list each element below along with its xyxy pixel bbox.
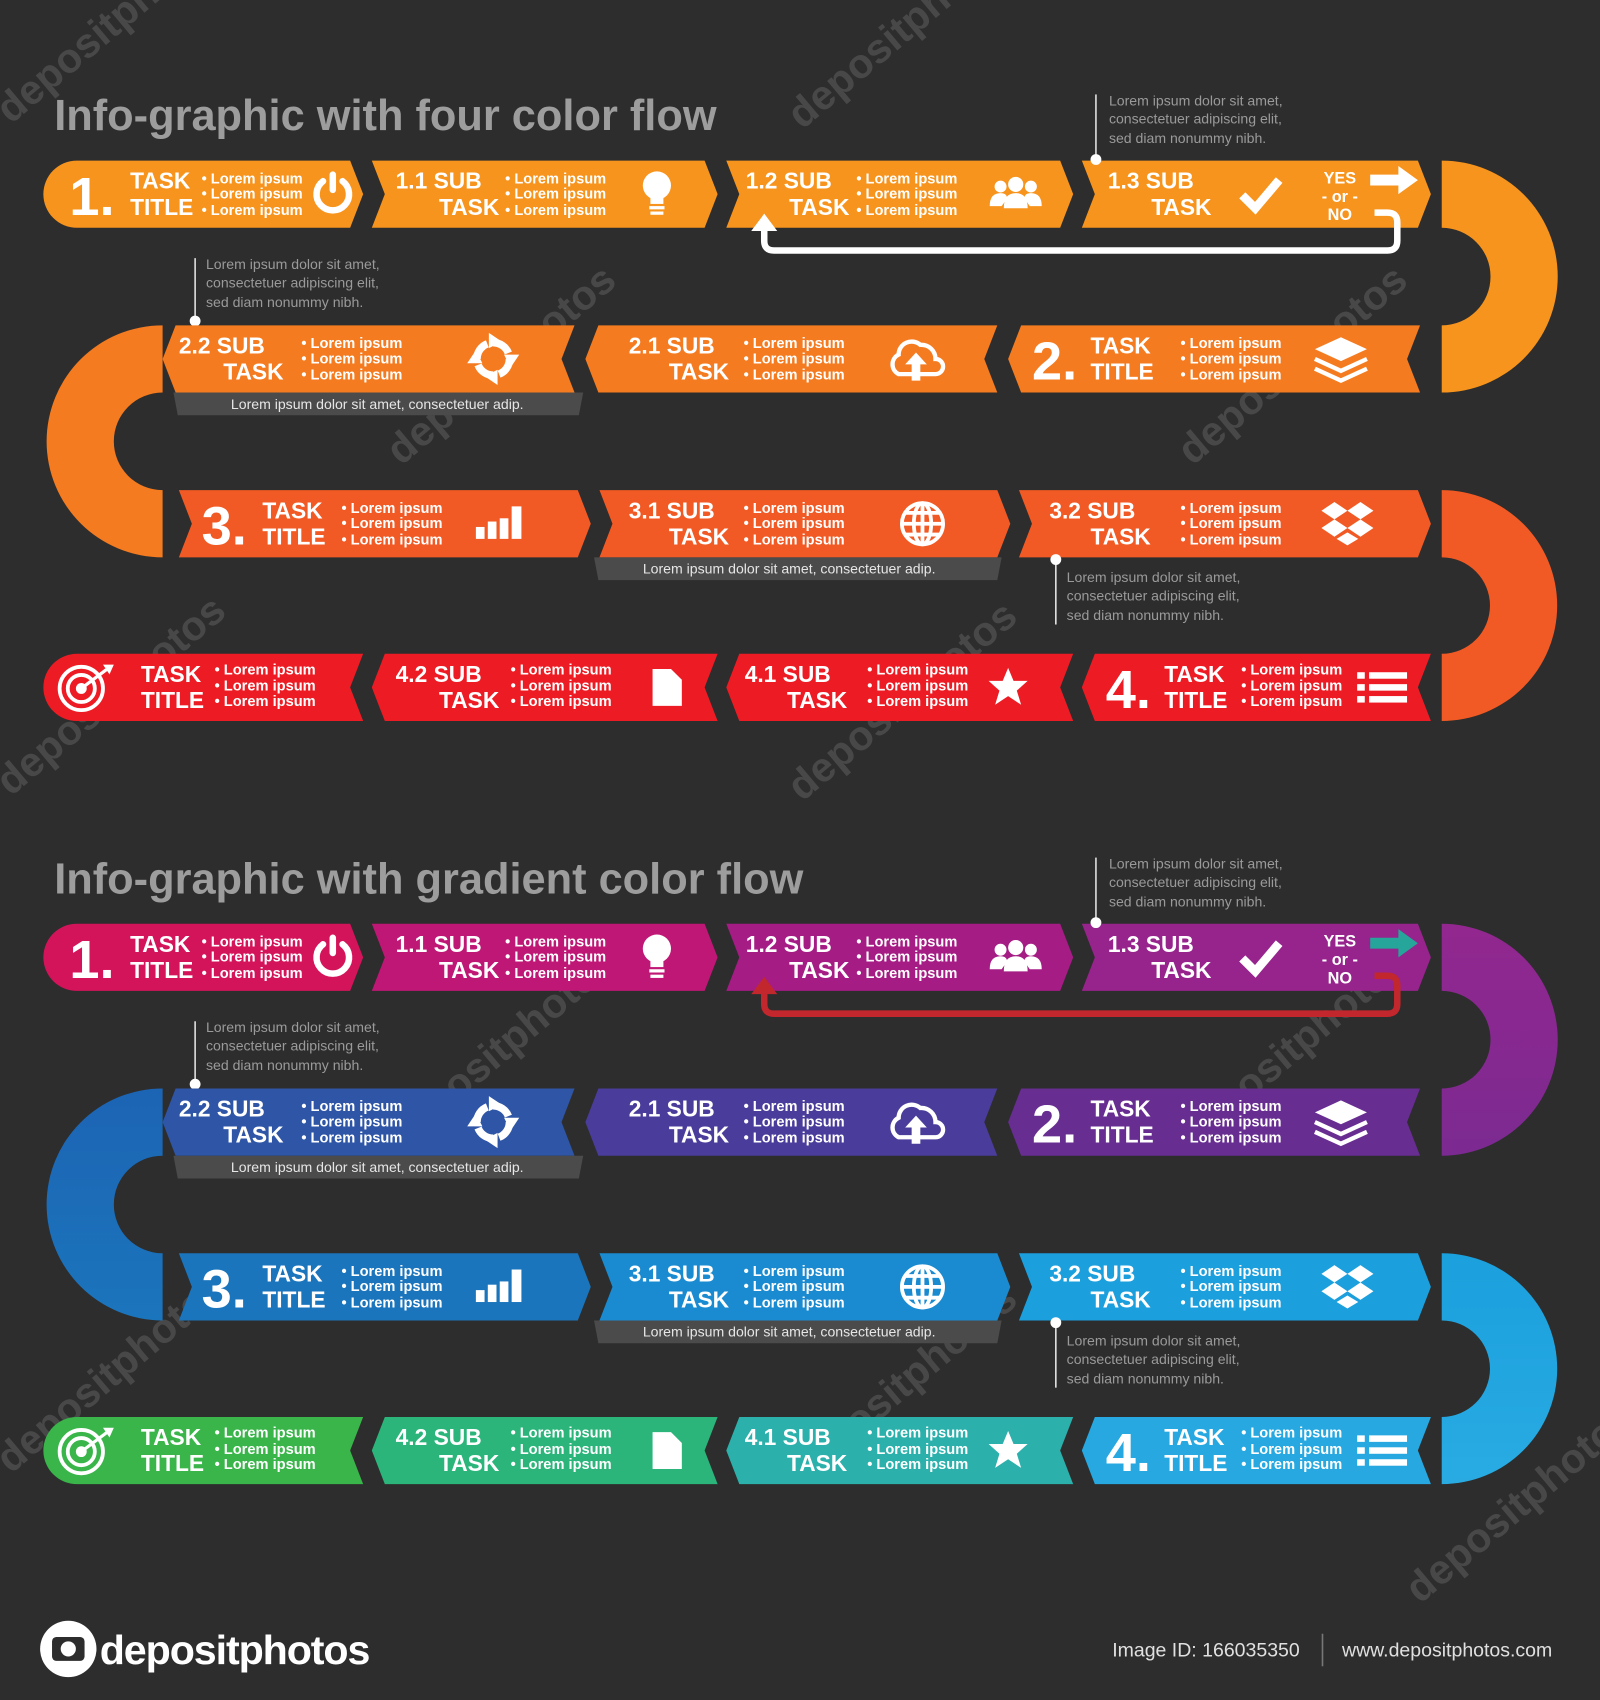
segment: 4.1 sub task: 4.1 SUB — [745, 1424, 831, 1450]
segment: 4 task title: TASK — [1164, 661, 1225, 687]
segment: 3.1 sub task: • Lorem ipsum — [744, 532, 845, 548]
segment: 2 task title: TASK — [1091, 333, 1151, 359]
segment: 3.2 sub task — [1019, 1253, 1431, 1320]
segment: 2 task title — [1008, 325, 1420, 393]
segment: 4.1 sub task: • Lorem ipsum — [867, 694, 968, 710]
segment: 1.1 sub task: • Lorem ipsum — [505, 187, 606, 203]
segment: 2.2 sub task: • Lorem ipsum — [301, 368, 402, 384]
arrow: yes — [1370, 929, 1418, 957]
callout: 3.2: Lorem ipsum dolor sit amet, — [1067, 1332, 1240, 1348]
callout: top right: consectetuer adipiscing elit, — [1109, 111, 1282, 127]
segment: 3 task title: TASK — [262, 497, 323, 523]
segment: 1.3 sub task: TASK — [1151, 957, 1212, 983]
segment: target task title: • Lorem ipsum — [215, 1426, 316, 1442]
section: gradient color flow — [43, 855, 1558, 1484]
segment: 2.2 sub task: TASK — [223, 1122, 284, 1148]
callout: 2.2: consectetuer adipiscing elit, — [206, 274, 379, 290]
segment: 2.1 sub task: • Lorem ipsum — [744, 1099, 845, 1115]
segment: 1 task title: • Lorem ipsum — [202, 203, 303, 219]
segment: 4.2 sub task: • Lorem ipsum — [511, 662, 612, 678]
segment: 4.2 sub task: TASK — [439, 1450, 500, 1476]
segment: 4.2 sub task: • Lorem ipsum — [511, 1426, 612, 1442]
segment: 4 task title: TITLE — [1164, 687, 1227, 713]
segment: 3 task title: • Lorem ipsum — [341, 1279, 442, 1295]
segment: 3.1 sub task: • Lorem ipsum — [744, 1264, 845, 1280]
segment: 2 task title: • Lorem ipsum — [1180, 336, 1282, 352]
watermarks: depositphotos — [377, 256, 624, 473]
note bar: row2: Lorem ipsum dolor sit amet, consectetuer adip. — [231, 1159, 524, 1175]
segment: 2.1 sub task: • Lorem ipsum — [744, 336, 845, 352]
callout: 3.2 — [1050, 1317, 1240, 1388]
segment: 1.1 sub task: • Lorem ipsum — [505, 203, 606, 219]
segment: 3 task title: TITLE — [262, 523, 326, 549]
title: four color flow: Info-graphic with four color flow — [54, 92, 717, 140]
note bar: row3 — [594, 1320, 1002, 1343]
callout: 2.2: Lorem ipsum dolor sit amet, — [206, 1019, 380, 1035]
segment: 4.1 sub task: • Lorem ipsum — [867, 1442, 968, 1458]
segment: 1.2 sub task: TASK — [789, 957, 850, 983]
segment: 4 task title: • Lorem ipsum — [1241, 1426, 1342, 1442]
callout: 3.2: consectetuer adipiscing elit, — [1067, 1351, 1240, 1367]
title: gradient color flow: Info-graphic with gradient color flow — [54, 855, 804, 903]
watermarks: depositphotos — [778, 1275, 1025, 1492]
segment: 1.2 sub task: • Lorem ipsum — [856, 966, 957, 982]
segment: 2 task title: • Lorem ipsum — [1180, 368, 1282, 384]
segment: 2 task title: 2. — [1032, 1095, 1077, 1155]
callout: 2.2: Lorem ipsum dolor sit amet, — [206, 256, 380, 272]
segment: 4 task title: • Lorem ipsum — [1241, 1457, 1342, 1473]
segment: 1 task title: TITLE — [130, 957, 193, 983]
segment: 3 task title: • Lorem ipsum — [341, 516, 442, 532]
note bar: row3: Lorem ipsum dolor sit amet, consectetuer adip. — [643, 561, 935, 577]
segment: 4.2 sub task: • Lorem ipsum — [511, 679, 612, 695]
segment: 4.1 sub task: • Lorem ipsum — [867, 662, 968, 678]
callout: 2.2: sed diam nonummy nibh. — [206, 294, 363, 310]
segment: 2.1 sub task: 2.1 SUB — [629, 1096, 715, 1122]
segment: 2.2 sub task: TASK — [223, 359, 284, 385]
segment: 3.1 sub task: TASK — [669, 1286, 730, 1312]
arc: row1 to row2 — [1442, 924, 1558, 1156]
callout: 3.2: sed diam nonummy nibh. — [1067, 607, 1224, 623]
segment: 2 task title: TITLE — [1091, 1122, 1154, 1148]
segment: 1.1 sub task: • Lorem ipsum — [505, 950, 606, 966]
segment: 3 task title: 3. — [202, 496, 247, 556]
segment: 1.3 sub task — [1082, 161, 1431, 228]
segment: 2.1 sub task: • Lorem ipsum — [744, 1131, 845, 1147]
segment: 2.1 sub task: 2.1 SUB — [629, 333, 715, 359]
callout: top right — [1091, 92, 1283, 165]
segment: 2.2 sub task: 2.2 SUB — [179, 1096, 265, 1122]
segment: 1.2 sub task: 1.2 SUB — [746, 168, 832, 194]
callout: top right: Lorem ipsum dolor sit amet, — [1109, 92, 1283, 108]
footer: image id: www.depositphotos.com — [1341, 1640, 1552, 1662]
segment: target task title: • Lorem ipsum — [215, 694, 316, 710]
segment: 1 task title: TITLE — [130, 194, 193, 220]
segment: 3.1 sub task: • Lorem ipsum — [744, 1279, 845, 1295]
segment: 2 task title: • Lorem ipsum — [1180, 1099, 1282, 1115]
segment: 1 task title — [43, 161, 363, 228]
segment: target task title: TASK — [141, 661, 202, 687]
segment: 4.1 sub task: TASK — [787, 687, 848, 713]
segment: 1 task title: • Lorem ipsum — [202, 187, 303, 203]
callout: 3.2: Lorem ipsum dolor sit amet, — [1067, 569, 1240, 585]
arc: row2 to row3 — [47, 325, 163, 557]
arc: row2 to row3 — [47, 1088, 163, 1320]
segment: 2.2 sub task: • Lorem ipsum — [301, 1131, 402, 1147]
segment: 1.1 sub task: TASK — [439, 194, 500, 220]
segment: 1.1 sub task — [372, 924, 718, 991]
segment: 3 task title — [179, 1253, 591, 1320]
segment: 3 task title: 3. — [202, 1259, 247, 1319]
segment: 1 task title: TASK — [130, 168, 191, 194]
segment: 3 task title — [179, 490, 591, 557]
note bar: row2 — [173, 393, 583, 415]
segment: 4.2 sub task: • Lorem ipsum — [511, 1442, 612, 1458]
segment: 1.2 sub task: • Lorem ipsum — [856, 187, 957, 203]
segment: target task title: • Lorem ipsum — [215, 679, 316, 695]
segment: 1.3 sub task: 1.3 SUB — [1108, 931, 1194, 957]
segment: 2.1 sub task: • Lorem ipsum — [744, 1114, 845, 1130]
segment: 1 task title: 1. — [69, 930, 115, 990]
watermarks: depositphotos — [377, 938, 624, 1156]
segment: 4.2 sub task: • Lorem ipsum — [511, 694, 612, 710]
segment: 1 task title: • Lorem ipsum — [202, 171, 303, 187]
segment: 3.2 sub task — [1019, 490, 1431, 557]
callout: 2.2 — [190, 256, 380, 326]
segment: 2.1 sub task: TASK — [669, 1122, 730, 1148]
segment: 3.2 sub task: 3.2 SUB — [1049, 1260, 1135, 1286]
callout: 3.2: consectetuer adipiscing elit, — [1067, 588, 1240, 604]
watermarks: depositphotos — [778, 592, 1025, 809]
segment: 4 task title: • Lorem ipsum — [1241, 662, 1342, 678]
segment: 3.1 sub task: • Lorem ipsum — [744, 1295, 845, 1311]
arc: row3 to row4 — [1442, 1253, 1557, 1484]
callout: top right: consectetuer adipiscing elit, — [1109, 874, 1282, 890]
segment: 4 task title: • Lorem ipsum — [1241, 1442, 1342, 1458]
segment: 1.3 sub task: TASK — [1151, 194, 1212, 220]
callout: top right — [1091, 855, 1283, 928]
segment: 2 task title: TITLE — [1091, 359, 1154, 385]
segment: 4.2 sub task: 4.2 SUB — [396, 1424, 482, 1450]
segment: 1.2 sub task: • Lorem ipsum — [856, 171, 957, 187]
segment: 2.2 sub task: • Lorem ipsum — [301, 336, 402, 352]
segment: 1.3 sub task: - or - — [1322, 188, 1358, 206]
callout: top right: sed diam nonummy nibh. — [1109, 130, 1266, 146]
segment: 1 task title: • Lorem ipsum — [202, 950, 303, 966]
arrow: yes — [1370, 166, 1418, 194]
segment: 3 task title: • Lorem ipsum — [341, 501, 442, 517]
segment: 1.3 sub task: YES — [1324, 932, 1356, 950]
segment: 1.1 sub task: • Lorem ipsum — [505, 966, 606, 982]
segment: 3.1 sub task — [599, 490, 1010, 557]
segment: 3.1 sub task: TASK — [669, 523, 730, 549]
segment: 1.2 sub task: • Lorem ipsum — [856, 934, 957, 950]
segment: 4 task title — [1082, 1417, 1431, 1484]
segment: 4.1 sub task: • Lorem ipsum — [867, 1457, 968, 1473]
arc: row3 to row4 — [1442, 490, 1557, 721]
segment: 1.1 sub task: TASK — [439, 957, 500, 983]
segment: 1 task title: • Lorem ipsum — [202, 934, 303, 950]
callout: 2.2: consectetuer adipiscing elit, — [206, 1038, 379, 1054]
footer: image id: Image ID: 166035350 — [1112, 1640, 1300, 1662]
segment: 4.1 sub task: • Lorem ipsum — [867, 679, 968, 695]
segment: 3.2 sub task: • Lorem ipsum — [1180, 516, 1282, 532]
segment: 2.1 sub task: • Lorem ipsum — [744, 368, 845, 384]
segment: 2 task title: • Lorem ipsum — [1180, 1114, 1282, 1130]
segment: 4.2 sub task — [372, 1417, 718, 1484]
segment: 3.2 sub task: TASK — [1091, 1286, 1151, 1312]
segment: target task title: • Lorem ipsum — [215, 1457, 316, 1473]
segment: 1.2 sub task: • Lorem ipsum — [856, 950, 957, 966]
segment: 4.2 sub task: 4.2 SUB — [396, 661, 482, 687]
segment: 1.3 sub task: YES — [1324, 169, 1356, 187]
segment: 4.2 sub task: • Lorem ipsum — [511, 1457, 612, 1473]
segment: 1.1 sub task: • Lorem ipsum — [505, 171, 606, 187]
segment: 2.2 sub task: • Lorem ipsum — [301, 1099, 402, 1115]
segment: 4.1 sub task — [726, 654, 1073, 721]
segment: 3 task title: TASK — [262, 1260, 323, 1286]
segment: 2.1 sub task: TASK — [669, 359, 730, 385]
segment: 4 task title — [1082, 654, 1431, 721]
segment: 4.1 sub task — [726, 1417, 1073, 1484]
watermarks: depositphotos — [1169, 938, 1416, 1156]
segment: 4.1 sub task: 4.1 SUB — [745, 661, 831, 687]
segment: 1.1 sub task: 1.1 SUB — [396, 168, 482, 194]
segment: 1.3 sub task: - or - — [1322, 951, 1358, 969]
callout: top right: sed diam nonummy nibh. — [1109, 893, 1266, 909]
callout: 2.2: sed diam nonummy nibh. — [206, 1057, 363, 1073]
segment: 2.1 sub task — [585, 1088, 997, 1156]
segment: 2 task title: 2. — [1032, 332, 1077, 392]
segment: target task title: TITLE — [141, 1450, 204, 1476]
arrow: no loop back — [751, 213, 1397, 251]
segment: 1.1 sub task: • Lorem ipsum — [505, 934, 606, 950]
segment: 3.1 sub task — [599, 1253, 1010, 1320]
segment: 1 task title: TASK — [130, 931, 191, 957]
segment: 1.2 sub task — [726, 924, 1073, 991]
segment: 1.2 sub task: 1.2 SUB — [746, 931, 832, 957]
segment: 3.1 sub task: • Lorem ipsum — [744, 516, 845, 532]
segment: target task title — [43, 1417, 363, 1484]
segment: target task title: • Lorem ipsum — [215, 1442, 316, 1458]
segment: 1 task title — [43, 924, 363, 991]
note bar: row3: Lorem ipsum dolor sit amet, consectetuer adip. — [643, 1324, 935, 1340]
segment: 3.2 sub task: 3.2 SUB — [1049, 497, 1135, 523]
note bar: row3 — [594, 557, 1002, 580]
arc: row1 to row2 — [1442, 161, 1558, 393]
segment: target task title: • Lorem ipsum — [215, 662, 316, 678]
segment: 4 task title: TASK — [1164, 1424, 1225, 1450]
footer: logo: depositphotos — [100, 1627, 370, 1673]
segment: 1.3 sub task: 1.3 SUB — [1108, 168, 1194, 194]
segment: target task title — [43, 654, 363, 721]
footer: logo — [40, 1621, 370, 1677]
segment: 3 task title: • Lorem ipsum — [341, 1295, 442, 1311]
segment: 2.2 sub task: 2.2 SUB — [179, 333, 265, 359]
segment: 4 task title: 4. — [1106, 660, 1151, 720]
segment: 3 task title: • Lorem ipsum — [341, 1264, 442, 1280]
segment: target task title: TASK — [141, 1424, 202, 1450]
segment: 1.2 sub task — [726, 161, 1073, 228]
segment: 3.2 sub task: • Lorem ipsum — [1180, 1264, 1282, 1280]
segment: 3.1 sub task: • Lorem ipsum — [744, 501, 845, 517]
segment: 4.2 sub task — [372, 654, 718, 721]
segment: 3.1 sub task: 3.1 SUB — [629, 497, 715, 523]
segment: 2.1 sub task — [585, 325, 997, 393]
segment: 1.3 sub task — [1082, 924, 1431, 991]
arrow: no loop back — [751, 976, 1397, 1014]
segment: 1 task title: • Lorem ipsum — [202, 966, 303, 982]
segment: 2.1 sub task: • Lorem ipsum — [744, 351, 845, 367]
segment: 2 task title: • Lorem ipsum — [1180, 351, 1282, 367]
segment: 4.2 sub task: TASK — [439, 687, 500, 713]
note bar: row2: Lorem ipsum dolor sit amet, consectetuer adip. — [231, 396, 524, 412]
segment: 3 task title: • Lorem ipsum — [341, 532, 442, 548]
segment: 4.1 sub task: TASK — [787, 1450, 848, 1476]
segment: 4 task title: • Lorem ipsum — [1241, 694, 1342, 710]
segment: 4 task title: 4. — [1106, 1423, 1151, 1483]
segment: 3.1 sub task: 3.1 SUB — [629, 1260, 715, 1286]
segment: 3.2 sub task: • Lorem ipsum — [1180, 1295, 1282, 1311]
callout: top right: Lorem ipsum dolor sit amet, — [1109, 855, 1283, 871]
footer: image id — [1112, 1634, 1552, 1666]
section: four color flow — [43, 92, 1558, 721]
segment: 4.1 sub task: • Lorem ipsum — [867, 1426, 968, 1442]
segment: 2.2 sub task — [163, 325, 575, 393]
segment: target task title: TITLE — [141, 687, 204, 713]
callout: 2.2 — [190, 1019, 380, 1090]
callout: 3.2 — [1050, 554, 1240, 625]
callout: 3.2: sed diam nonummy nibh. — [1067, 1370, 1224, 1386]
segment: 2.2 sub task — [163, 1088, 575, 1156]
segment: 3.2 sub task: • Lorem ipsum — [1180, 501, 1282, 517]
segment: 3.2 sub task: • Lorem ipsum — [1180, 532, 1282, 548]
segment: 3.2 sub task: • Lorem ipsum — [1180, 1279, 1282, 1295]
watermarks: depositphotos — [1169, 256, 1416, 473]
segment: 4 task title: TITLE — [1164, 1450, 1227, 1476]
segment: 3.2 sub task: TASK — [1091, 523, 1151, 549]
segment: 1.1 sub task: 1.1 SUB — [396, 931, 482, 957]
note bar: row2 — [173, 1156, 583, 1178]
segment: 1.1 sub task — [372, 161, 718, 228]
segment: 1.3 sub task: NO — [1328, 206, 1352, 224]
segment: 4 task title: • Lorem ipsum — [1241, 679, 1342, 695]
segment: 2.2 sub task: • Lorem ipsum — [301, 1114, 402, 1130]
segment: 1.2 sub task: TASK — [789, 194, 850, 220]
segment: 1.2 sub task: • Lorem ipsum — [856, 203, 957, 219]
segment: 2 task title: TASK — [1091, 1096, 1151, 1122]
segment: 1 task title: 1. — [69, 167, 115, 227]
segment: 2 task title — [1008, 1088, 1420, 1156]
segment: 3 task title: TITLE — [262, 1286, 326, 1312]
segment: 1.3 sub task: NO — [1328, 969, 1352, 987]
segment: 2.2 sub task: • Lorem ipsum — [301, 351, 402, 367]
segment: 2 task title: • Lorem ipsum — [1180, 1131, 1282, 1147]
